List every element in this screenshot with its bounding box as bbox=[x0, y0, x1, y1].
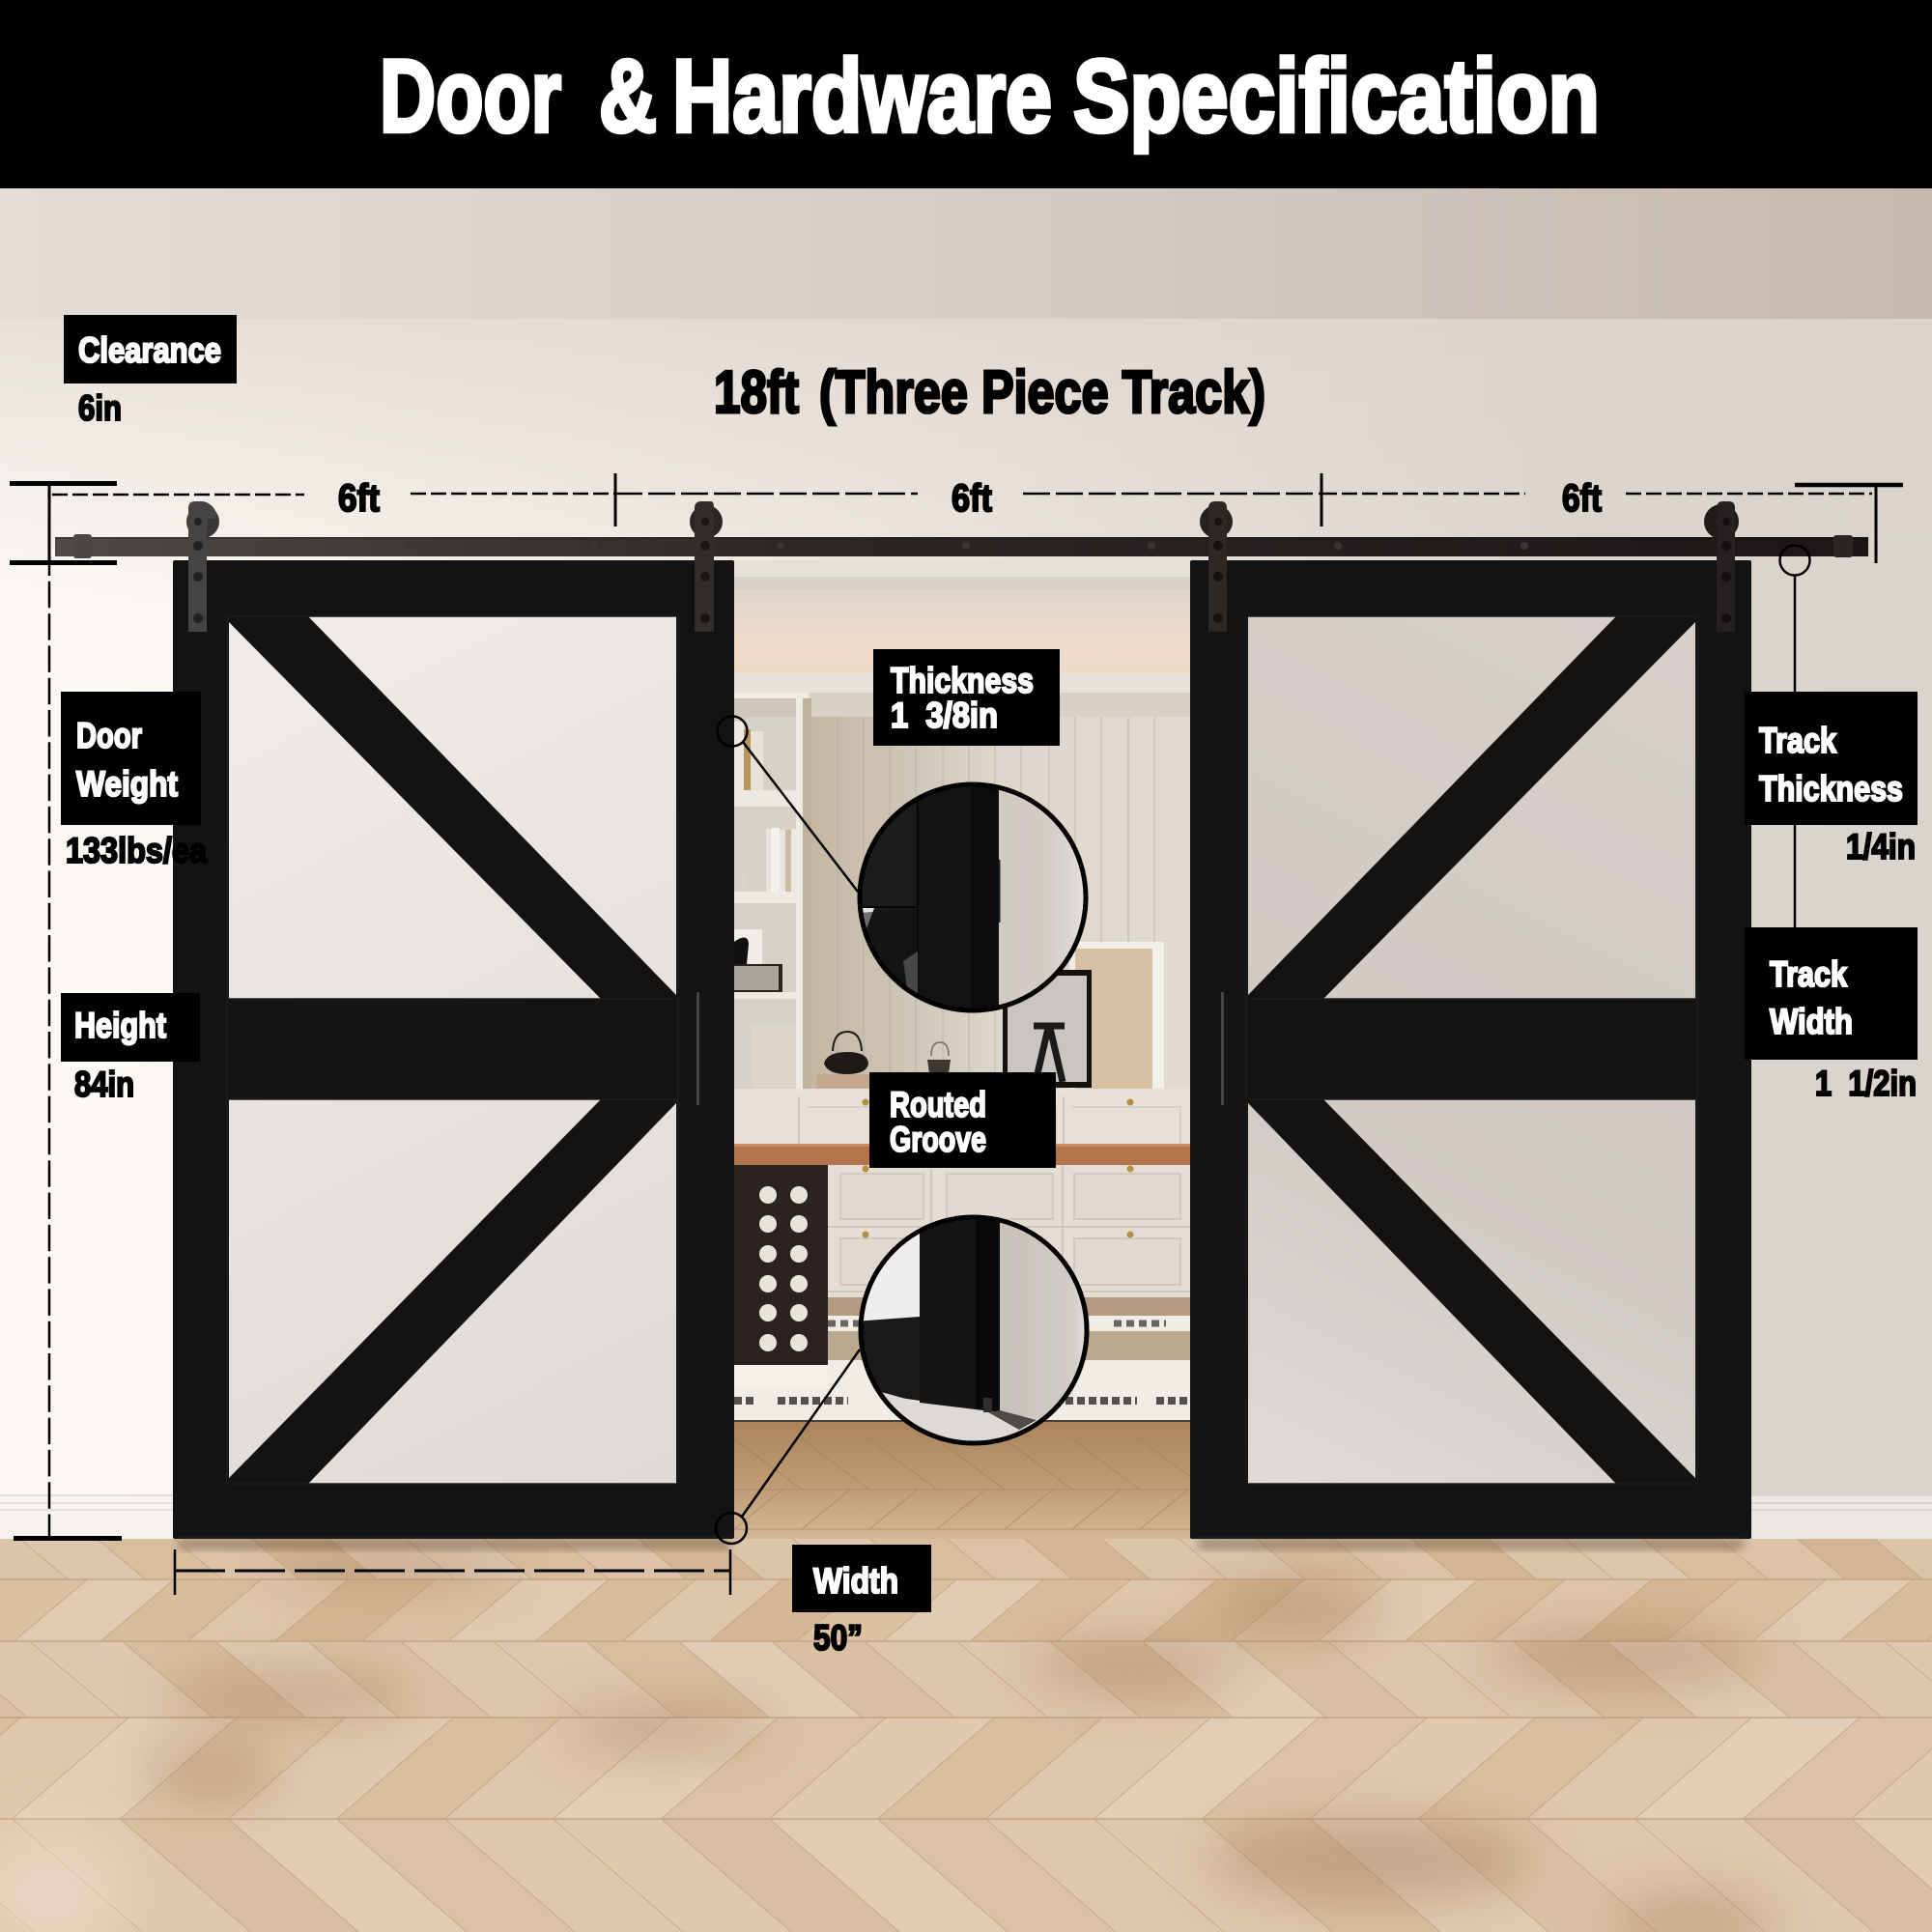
artwork and framed photo bbox=[1003, 942, 1164, 1089]
title: Door bbox=[380, 38, 561, 154]
books top shelf bbox=[734, 722, 763, 790]
tea pots bbox=[816, 1032, 951, 1089]
patterned book box bbox=[752, 1026, 796, 1088]
routed groove callout: Routed bbox=[890, 1085, 986, 1124]
routed groove callout: Groove bbox=[890, 1120, 986, 1159]
track width callout: Track bbox=[1770, 954, 1847, 994]
right door handle bbox=[1221, 992, 1224, 1105]
wood countertop bbox=[734, 1144, 1190, 1165]
routed groove callout bbox=[869, 1072, 1056, 1168]
track leader with circle bbox=[1779, 545, 1810, 927]
track thickness callout: 1/4in bbox=[1846, 827, 1916, 867]
hanger 1 bbox=[186, 501, 219, 632]
framed print and radio bbox=[734, 929, 782, 992]
title bbox=[380, 38, 1600, 154]
magnifier: door thickness bbox=[858, 782, 1088, 1012]
header bar bbox=[0, 0, 1932, 188]
left door handle bbox=[696, 992, 699, 1105]
width callout bbox=[792, 1545, 931, 1658]
interior header and ceiling bbox=[734, 560, 1190, 717]
height callout bbox=[61, 993, 200, 1104]
door weight callout: Door bbox=[76, 716, 142, 755]
track segment labels: 6ft bbox=[338, 477, 380, 520]
height dimension line bbox=[14, 549, 122, 1538]
clearance callout: 6in bbox=[78, 388, 122, 428]
leader line to groove magnifier bbox=[716, 1350, 860, 1544]
track total length heading: (Three Piece Track) bbox=[819, 359, 1265, 426]
track total length heading bbox=[714, 359, 1265, 426]
view through the opening: interior room bbox=[734, 560, 1208, 1539]
track thickness callout: Thickness bbox=[1759, 769, 1903, 809]
magnifier: routed groove bbox=[850, 1208, 1092, 1449]
baseboard left bbox=[0, 1494, 173, 1539]
baseboard right bbox=[1751, 1494, 1932, 1539]
clearance callout bbox=[64, 315, 237, 428]
upper cabinets bbox=[734, 1089, 1190, 1144]
leader line to thickness magnifier bbox=[717, 717, 858, 892]
right barn door bbox=[1190, 560, 1751, 1539]
thickness callout: 1 3/8in bbox=[891, 696, 998, 735]
title: Hardware bbox=[672, 38, 1052, 154]
thickness callout: Thickness bbox=[891, 661, 1034, 700]
track segment dimension lines bbox=[52, 473, 1872, 526]
background room bbox=[0, 188, 1932, 1539]
height callout: 84in bbox=[74, 1065, 134, 1104]
wall bbox=[0, 319, 1932, 1539]
track segment labels: 6ft bbox=[1562, 477, 1602, 520]
track total length heading: 18ft bbox=[714, 359, 799, 426]
title: Specification bbox=[1073, 38, 1600, 154]
door width dimension line bbox=[175, 1549, 730, 1595]
track thickness callout: Track bbox=[1759, 721, 1836, 760]
track segment labels: 6ft bbox=[952, 477, 992, 520]
track width callout bbox=[1745, 927, 1918, 1103]
black perforated table leg bbox=[734, 1165, 828, 1365]
hanger 2 bbox=[690, 501, 723, 632]
beadboard wall bbox=[810, 717, 1190, 1092]
height callout: Height bbox=[74, 1006, 166, 1045]
track width callout: Width bbox=[1770, 1002, 1853, 1041]
herringbone wood floor bbox=[0, 1539, 1932, 1932]
thickness callout bbox=[873, 649, 1060, 746]
door weight callout bbox=[61, 692, 207, 870]
title: & bbox=[599, 38, 657, 154]
door weight callout: Weight bbox=[76, 764, 178, 804]
bookcase bbox=[734, 693, 811, 1096]
width callout: 50” bbox=[813, 1618, 863, 1658]
track segment labels bbox=[338, 477, 1602, 520]
clearance dimension bracket left bbox=[10, 483, 117, 563]
door floor shadow bbox=[179, 1540, 1744, 1548]
books middle shelf bbox=[734, 828, 796, 892]
hanger 3 bbox=[1200, 501, 1233, 632]
hanger 4 bbox=[1704, 501, 1739, 632]
width callout: Width bbox=[813, 1561, 898, 1601]
door weight callout: 133lbs/ea bbox=[66, 831, 207, 870]
track thickness callout bbox=[1745, 692, 1918, 867]
left barn door bbox=[173, 560, 734, 1539]
lower cabinets bbox=[734, 1165, 1190, 1297]
interior floor and rug bbox=[734, 1297, 1208, 1539]
right track bracket bbox=[1795, 485, 1903, 563]
track rail with stops bbox=[55, 534, 1868, 558]
clearance callout: Clearance bbox=[78, 330, 221, 370]
ceiling bbox=[0, 188, 1932, 319]
